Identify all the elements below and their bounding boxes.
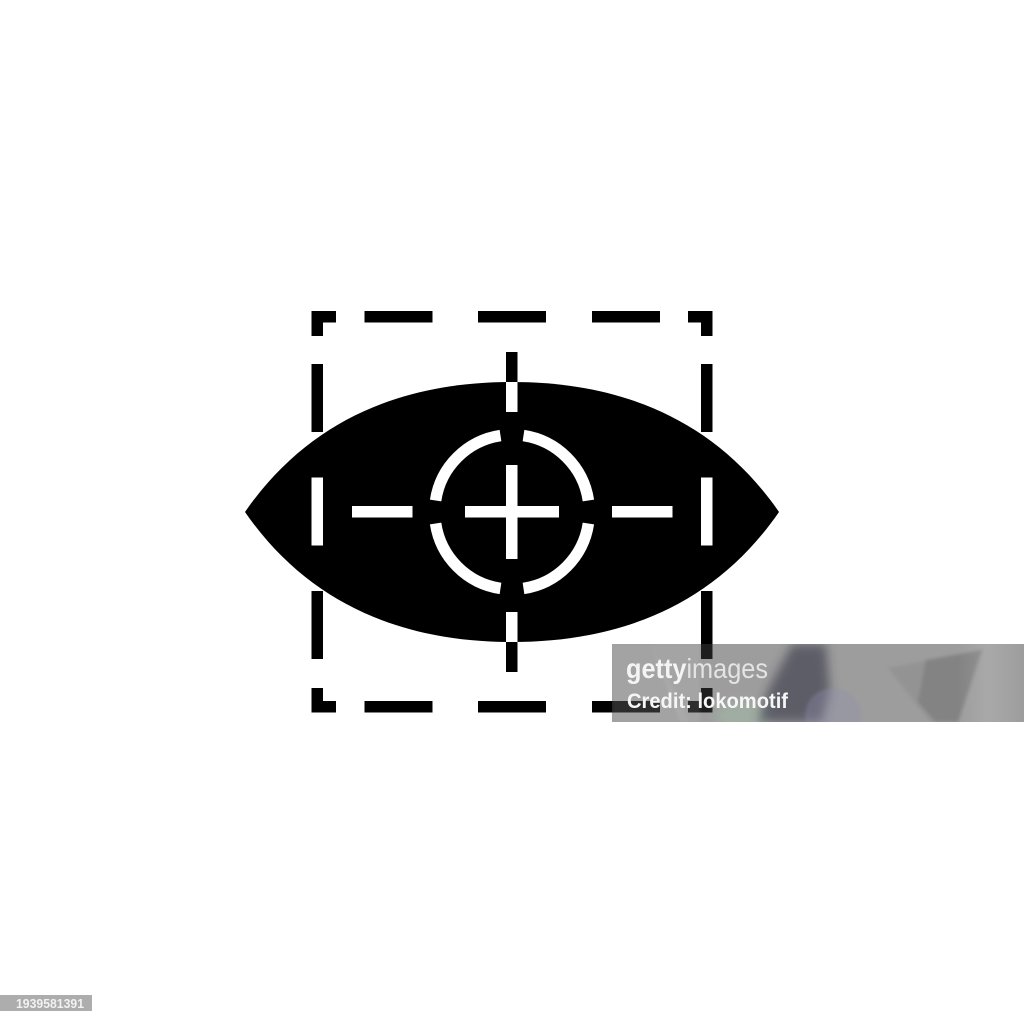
target ring — [436, 436, 588, 588]
id background — [0, 995, 92, 1011]
frame dashes inside the eye — [312, 478, 712, 546]
image id tag — [0, 995, 92, 1011]
dashed focus frame — [312, 311, 712, 712]
id number: 1939581391 — [16, 997, 84, 1011]
watermark banner — [612, 644, 1024, 722]
icon: eye with focus target — [245, 311, 779, 712]
banner background — [612, 644, 1024, 722]
eye shape — [245, 382, 779, 642]
watermark logo: gettyimages — [626, 653, 768, 684]
watermark credit: Credit: lokomotif — [627, 690, 789, 713]
centre plus — [465, 465, 559, 559]
crosshair ticks — [352, 352, 672, 672]
